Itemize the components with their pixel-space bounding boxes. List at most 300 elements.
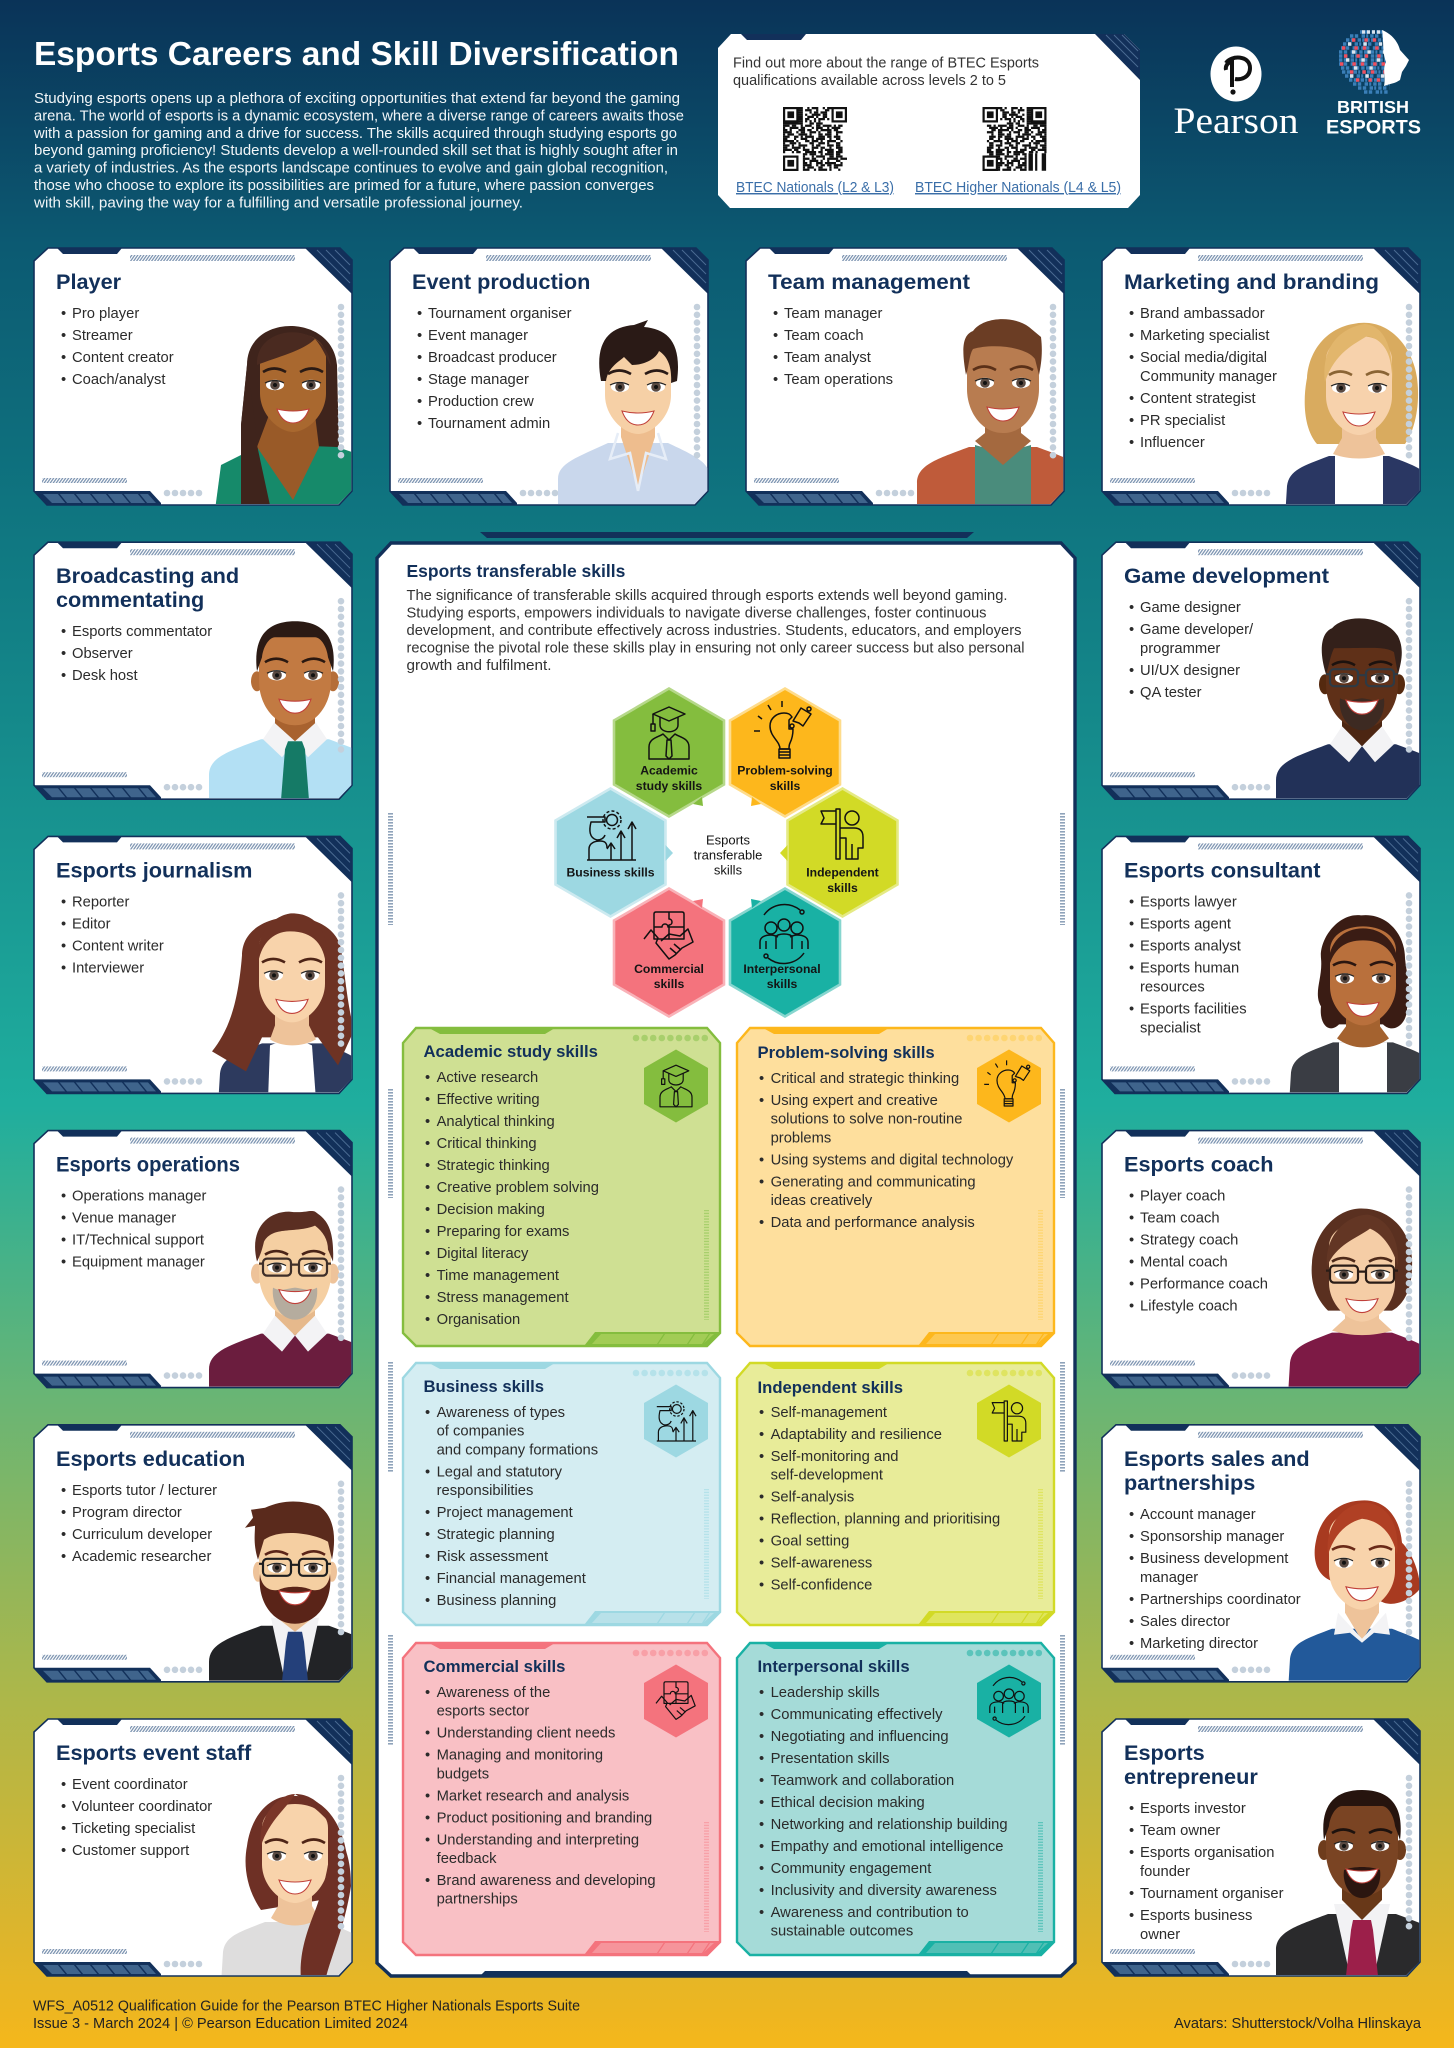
career card: Esports sales and partnerships: • xyxy=(1129,1551,1134,1567)
skill panel: Business skills: Financial management xyxy=(437,1571,586,1587)
skill panel: Academic study skills: Organisation xyxy=(437,1312,520,1328)
logo: Pearson xyxy=(1174,46,1298,142)
skill panel: Interpersonal skills: Negotiating and influencing xyxy=(771,1729,949,1745)
icon: team xyxy=(977,1664,1041,1738)
hexagon: Academic study skills: Academic xyxy=(640,764,698,778)
hexagon: Commercial skills: Commercial xyxy=(634,962,704,976)
career card: Esports coach: Esports coach xyxy=(1124,1152,1273,1177)
career card: Esports operations: • xyxy=(61,1211,66,1227)
career card: Esports event staff: Ticketing specialist xyxy=(72,1821,195,1837)
skill panel: Independent skills: • xyxy=(759,1490,764,1506)
career card: Esports coach: • xyxy=(1129,1189,1134,1205)
career card: Esports event staff xyxy=(34,1719,369,1985)
skill panel: Academic study skills xyxy=(403,1028,720,1346)
icon: flag person xyxy=(977,1384,1041,1458)
skill panel: Academic study skills: • xyxy=(425,1268,430,1284)
career card: Esports entrepreneur: • xyxy=(1129,1908,1134,1924)
skill panel: Independent skills: • xyxy=(759,1534,764,1550)
career card: Esports journalism: Editor xyxy=(72,916,111,932)
skill panel: Problem-solving skills xyxy=(737,1028,1054,1346)
career card: Marketing and branding: • xyxy=(1129,328,1134,344)
career card: Team management: • xyxy=(773,372,778,388)
career card: Team management: Team manager xyxy=(784,306,882,322)
skill panel: Business skills: Project management xyxy=(437,1505,573,1521)
career card: Event production: • xyxy=(417,328,422,344)
career card: Esports entrepreneur: • xyxy=(1129,1801,1134,1817)
skill panel: Interpersonal skills: Awareness and contribution to xyxy=(771,1905,969,1921)
career card: Esports education: • xyxy=(61,1549,66,1565)
career card: Esports journalism: Interviewer xyxy=(72,960,144,976)
career card: Esports entrepreneur: Esports business xyxy=(1140,1908,1252,1924)
career card: Esports journalism: Esports journalism xyxy=(56,857,252,882)
skill panel: Interpersonal skills: • xyxy=(759,1883,764,1899)
skill panel: Business skills: Legal and statutory xyxy=(437,1464,563,1480)
skill panel: Academic study skills: Academic study skills xyxy=(424,1042,598,1061)
hexagon diagram xyxy=(556,688,898,1016)
career card: Esports coach: Player coach xyxy=(1140,1189,1225,1205)
career card: Event production: • xyxy=(417,372,422,388)
skill panel: Academic study skills: Active research xyxy=(437,1070,538,1086)
skill panel: Interpersonal skills: Teamwork and collaboration xyxy=(771,1773,954,1789)
career card: Esports entrepreneur: • xyxy=(1129,1823,1134,1839)
skill panel: Independent skills: • xyxy=(759,1405,764,1421)
career card: Esports coach: Team coach xyxy=(1140,1211,1220,1227)
skill panel: Commercial skills: Brand awareness and developing xyxy=(437,1873,656,1889)
career card: Esports sales and partnerships: • xyxy=(1129,1636,1134,1652)
skill panel: Interpersonal skills: • xyxy=(759,1751,764,1767)
skill panel: Interpersonal skills: • xyxy=(759,1707,764,1723)
career card: Esports coach: Lifestyle coach xyxy=(1140,1299,1238,1315)
career card: Esports coach: Strategy coach xyxy=(1140,1233,1238,1249)
skill panel: Academic study skills: Stress management xyxy=(437,1290,569,1306)
career card: Player xyxy=(34,248,355,510)
skill panel: Independent skills: Self-awareness xyxy=(771,1556,872,1572)
skill panel: Interpersonal skills: Community engagement xyxy=(771,1861,931,1877)
skill panel: Interpersonal skills: Communicating effectively xyxy=(771,1707,943,1723)
career card: Esports coach: Mental coach xyxy=(1140,1255,1228,1271)
career card: Esports education: Esports tutor / lecturer xyxy=(72,1483,217,1499)
skill panel: Independent skills: • xyxy=(759,1449,764,1465)
career card: Esports sales and partnerships: Business development xyxy=(1140,1551,1288,1567)
text block: transferable skills intro: growth and fulfilment. xyxy=(406,658,552,674)
skill panel: Independent skills: self-development xyxy=(771,1468,883,1484)
icon: lightbulb xyxy=(977,1050,1041,1122)
intro text block: those who choose to explore its possibilities are primed for a future, where passion converges xyxy=(34,178,654,194)
logo: British Esports: BRITISH xyxy=(1337,97,1409,117)
career card: Esports consultant: resources xyxy=(1140,979,1205,995)
skill panel: Academic study skills: • xyxy=(425,1224,430,1240)
career card: Esports coach: • xyxy=(1129,1233,1134,1249)
skill panel: Problem-solving skills: problems xyxy=(771,1130,831,1146)
career card: Marketing and branding: • xyxy=(1129,413,1134,429)
logo: Pearson: Pearson xyxy=(1174,101,1298,142)
career card: Game development: Game development xyxy=(1124,563,1329,588)
QR code 2 xyxy=(982,107,1046,171)
career card: Player: Coach/analyst xyxy=(72,372,165,388)
career card: Marketing and branding: Community manager xyxy=(1140,369,1277,385)
skill panel: Problem-solving skills: ideas creatively xyxy=(771,1193,873,1209)
avatar: esports operations xyxy=(209,1211,352,1387)
career card: Team management: Team management xyxy=(768,269,970,294)
career card: Event production: Broadcast producer xyxy=(428,350,557,366)
intro text block: with skill, paving the way for a fulfilling and versatile professional journey. xyxy=(33,195,523,211)
career card: Player: Content creator xyxy=(72,350,174,366)
centre label: transferable xyxy=(694,848,762,862)
skill panel: Academic study skills: Preparing for exams xyxy=(437,1224,569,1240)
skill panel: Independent skills xyxy=(737,1363,1054,1625)
career card: Esports operations: IT/Technical support xyxy=(72,1233,204,1249)
skill panel: Independent skills: • xyxy=(759,1427,764,1443)
career card: Event production: • xyxy=(417,416,422,432)
skill panel: Interpersonal skills: Ethical decision making xyxy=(771,1795,925,1811)
avatar: team management xyxy=(916,319,1064,504)
hexagon: Academic study skills xyxy=(614,688,724,816)
career card: Esports sales and partnerships: Marketing director xyxy=(1140,1636,1258,1652)
centre label: skills xyxy=(714,862,743,878)
avatar: esports education xyxy=(209,1502,352,1681)
skill panel: Academic study skills: • xyxy=(425,1202,430,1218)
career card: Marketing and branding: PR specialist xyxy=(1140,413,1225,429)
career card: Event production: Tournament organiser xyxy=(428,306,572,322)
career card: Game development: QA tester xyxy=(1140,685,1202,701)
career card: Esports consultant: • xyxy=(1129,894,1134,910)
skill panel: Business skills: Business skills xyxy=(424,1377,544,1396)
skill panel: Business skills: • xyxy=(425,1405,430,1421)
career card: Game development: UI/UX designer xyxy=(1140,663,1240,679)
skill panel: Interpersonal skills: • xyxy=(759,1817,764,1833)
skill panel: Business skills: • xyxy=(425,1527,430,1543)
career card: Player: Streamer xyxy=(72,328,133,344)
skill panel: Independent skills: Goal setting xyxy=(771,1534,849,1550)
skill panel: Interpersonal skills: Leadership skills xyxy=(771,1685,880,1701)
text block: transferable skills intro xyxy=(406,588,1024,674)
career card: Team management: • xyxy=(773,328,778,344)
logo: British Esports xyxy=(1326,30,1421,138)
career card: Game development: programmer xyxy=(1140,641,1220,657)
skill panel: Independent skills: Self-analysis xyxy=(771,1490,854,1506)
panel: QR links: qualifications available across levels 2 to 5 xyxy=(733,73,1006,89)
hexagon: Problem-solving skills: skills xyxy=(770,779,800,793)
text block: transferable skills intro: development, and contribute effectively across industries. Students, educators, and employers xyxy=(406,623,1022,639)
centre label: Esports xyxy=(706,832,751,848)
career card: Esports entrepreneur: owner xyxy=(1140,1927,1180,1943)
career card: Event production: • xyxy=(417,394,422,410)
hexagon: Interpersonal skills xyxy=(730,888,840,1016)
career card: Marketing and branding: • xyxy=(1129,350,1134,366)
career card: Esports sales and partnerships: Sales director xyxy=(1140,1614,1230,1630)
career card: Esports event staff: • xyxy=(61,1799,66,1815)
career card: Esports education: • xyxy=(61,1505,66,1521)
hexagon: Commercial skills xyxy=(614,888,724,1016)
skill panel: Commercial skills: esports sector xyxy=(437,1704,529,1720)
skill panel: Commercial skills: Market research and analysis xyxy=(437,1788,629,1804)
skill panel: Business skills: Strategic planning xyxy=(437,1527,555,1543)
skill panel: Commercial skills: Commercial skills xyxy=(424,1657,565,1676)
career card: Esports consultant: Esports agent xyxy=(1140,916,1231,932)
skill panel: Independent skills: • xyxy=(759,1512,764,1528)
career card: Esports operations: • xyxy=(61,1233,66,1249)
career card: Marketing and branding: Brand ambassador xyxy=(1140,306,1265,322)
career card: Esports event staff: Customer support xyxy=(72,1843,189,1859)
intro text block: with a passion for gaming and a drive for success. The skills acquired through studying esports go xyxy=(33,126,677,142)
career card: Event production: Event manager xyxy=(428,328,528,344)
skill panel: Business skills: • xyxy=(425,1505,430,1521)
career card: Esports event staff: • xyxy=(61,1843,66,1859)
panel: QR links xyxy=(718,34,1140,208)
skill panel: Business skills: and company formations xyxy=(437,1442,598,1458)
career card: Player: • xyxy=(61,350,66,366)
hexagon: Problem-solving skills xyxy=(730,688,840,816)
skill panel: Interpersonal skills: Networking and relationship building xyxy=(771,1817,1008,1833)
career card: Esports coach: • xyxy=(1129,1211,1134,1227)
career card: Esports entrepreneur: entrepreneur xyxy=(1124,1764,1258,1789)
career card: Player: Player xyxy=(56,269,122,294)
skill panel: Academic study skills: Analytical thinking xyxy=(437,1114,555,1130)
career card: Esports consultant: Esports analyst xyxy=(1140,938,1241,954)
skill panel: Academic study skills: • xyxy=(425,1312,430,1328)
career card: Event production xyxy=(390,248,710,512)
skill panel: Business skills: • xyxy=(425,1549,430,1565)
logo: British Esports: ESPORTS xyxy=(1326,116,1421,138)
skill panel: Commercial skills: • xyxy=(425,1685,430,1701)
skill panel: Interpersonal skills: sustainable outcomes xyxy=(771,1924,913,1940)
career card: Marketing and branding: Content strategist xyxy=(1140,391,1256,407)
career card: Esports coach: • xyxy=(1129,1277,1134,1293)
skill panel: Academic study skills: • xyxy=(425,1136,430,1152)
career card: Esports sales and partnerships: manager xyxy=(1140,1570,1198,1586)
skill panel: Interpersonal skills: Presentation skills xyxy=(771,1751,889,1767)
career card: Marketing and branding: Marketing specialist xyxy=(1140,328,1270,344)
avatar: broadcasting xyxy=(209,621,352,798)
career card: Broadcasting and commentating: Esports commentator xyxy=(72,624,212,640)
skill panel: Academic study skills: Creative problem solving xyxy=(437,1180,599,1196)
skill panel: Interpersonal skills: • xyxy=(759,1861,764,1877)
footer: Avatars: Shutterstock/Volha Hlinskaya xyxy=(1174,2016,1422,2032)
panel: QR links: BTEC Nationals (L2 & L3) xyxy=(736,180,894,196)
career card: Esports entrepreneur: Esports investor xyxy=(1140,1801,1246,1817)
skill panel: Commercial skills: budgets xyxy=(437,1766,489,1782)
career card: Esports entrepreneur: • xyxy=(1129,1886,1134,1902)
icon: handshake puzzle xyxy=(644,1664,708,1738)
hexagon: Academic study skills: study skills xyxy=(636,779,702,793)
skill panel: Interpersonal skills: Interpersonal skills xyxy=(758,1657,910,1676)
career card: Broadcasting and commentating: Observer xyxy=(72,646,133,662)
career card: Event production: Stage manager xyxy=(428,372,529,388)
career card: Esports coach: • xyxy=(1129,1299,1134,1315)
skill panel: Business skills: Risk assessment xyxy=(437,1549,548,1565)
career card: Marketing and branding: Influencer xyxy=(1140,435,1205,451)
skill panel: Business skills xyxy=(403,1363,720,1625)
career card: Esports consultant: • xyxy=(1129,938,1134,954)
career card: Event production: Tournament admin xyxy=(428,416,550,432)
career card: Esports entrepreneur xyxy=(1102,1719,1448,1985)
career card: Esports sales and partnerships: Esports sales and xyxy=(1124,1446,1310,1471)
skill panel: Problem-solving skills: Using expert and creative xyxy=(771,1093,938,1109)
text block: transferable skills intro: The significance of transferable skills acquired through esports extends well beyond gaming. xyxy=(406,588,1007,604)
career card: Esports consultant: Esports facilities xyxy=(1140,1001,1247,1017)
skill panel: Interpersonal skills: • xyxy=(759,1685,764,1701)
skill panel: Problem-solving skills: solutions to solve non-routine xyxy=(771,1112,962,1128)
career card: Esports event staff: Esports event staff xyxy=(56,1740,252,1765)
hexagon: Problem-solving skills: Problem-solving xyxy=(737,764,833,778)
career card: Esports consultant xyxy=(1102,836,1437,1105)
panel: QR links: Find out more about the range of BTEC Esports xyxy=(733,55,1039,71)
career card: Esports journalism: Reporter xyxy=(72,894,129,910)
icon: business growth xyxy=(644,1384,708,1458)
career card: Esports operations: • xyxy=(61,1189,66,1205)
career card: Esports entrepreneur: Esports xyxy=(1124,1740,1205,1765)
career card: Game development: • xyxy=(1129,600,1134,616)
skill panel: Academic study skills: • xyxy=(425,1180,430,1196)
career card: Esports operations: Operations manager xyxy=(72,1189,207,1205)
career card: Esports coach xyxy=(1102,1131,1436,1396)
avatar: esports event staff xyxy=(222,1794,352,1975)
career card: Esports operations: • xyxy=(61,1255,66,1271)
skill panel: Independent skills: • xyxy=(759,1578,764,1594)
career card: Esports consultant: Esports human xyxy=(1140,960,1239,976)
career card: Player: Pro player xyxy=(72,306,139,322)
skill panel: Interpersonal skills xyxy=(737,1643,1054,1955)
skill panel: Commercial skills: • xyxy=(425,1810,430,1826)
career card: Esports consultant: • xyxy=(1129,916,1134,932)
career card: Broadcasting and commentating: • xyxy=(61,668,66,684)
career card: Esports education: Esports education xyxy=(56,1446,245,1471)
career card: Esports sales and partnerships xyxy=(1102,1425,1436,1692)
career card: Marketing and branding: • xyxy=(1129,391,1134,407)
skill panel: Independent skills: Self-management xyxy=(771,1405,887,1421)
intro text block: beyond gaming proficiency! Students develop a well-rounded skill set that is highly sought after in xyxy=(34,143,678,159)
heading: transferable skills: Esports transferable skills xyxy=(406,561,626,581)
skill panel: Academic study skills: Strategic thinking xyxy=(437,1158,550,1174)
skill panel: Business skills: of companies xyxy=(437,1424,524,1440)
career card: Esports education: Program director xyxy=(72,1505,182,1521)
career card: Broadcasting and commentating: commentating xyxy=(56,587,204,612)
career card: Game development: • xyxy=(1129,663,1134,679)
skill panel: Interpersonal skills: • xyxy=(759,1729,764,1745)
career card: Player: • xyxy=(61,372,66,388)
hexagon: Interpersonal skills: Interpersonal xyxy=(743,962,821,976)
career card: Broadcasting and commentating: Desk host xyxy=(72,668,138,684)
skill panel: Problem-solving skills: Critical and strategic thinking xyxy=(771,1071,959,1087)
intro text block: a variety of industries. As the esports landscape continues to evolve and gain global recognition, xyxy=(34,161,668,177)
skill panel: Independent skills: Reflection, planning and prioritising xyxy=(771,1512,1000,1528)
career card: Esports operations xyxy=(33,1130,353,1388)
skill panel: Academic study skills: • xyxy=(425,1246,430,1262)
career card: Esports consultant: • xyxy=(1129,960,1134,976)
skill panel: Commercial skills: Product positioning and branding xyxy=(437,1810,652,1826)
career card: Esports sales and partnerships: • xyxy=(1129,1614,1134,1630)
career card: Esports journalism: • xyxy=(61,894,66,910)
skill panel: Problem-solving skills: Using systems and digital technology xyxy=(771,1152,1014,1168)
skill panel: Commercial skills xyxy=(403,1643,720,1955)
career card: Team management xyxy=(745,247,1065,506)
skill panel: Independent skills: • xyxy=(759,1556,764,1572)
avatar: player xyxy=(215,326,355,510)
career card: Esports event staff: • xyxy=(61,1821,66,1837)
skill panel: Interpersonal skills: • xyxy=(759,1905,764,1921)
avatar: esports coach xyxy=(1288,1208,1420,1387)
career card: Game development: • xyxy=(1129,622,1134,638)
career card: Esports sales and partnerships: • xyxy=(1129,1507,1134,1523)
career card: Event production: • xyxy=(417,306,422,322)
career card: Esports entrepreneur: Esports organisation xyxy=(1140,1845,1274,1861)
skill panel: Commercial skills: Managing and monitoring xyxy=(437,1748,603,1764)
career card: Esports education: • xyxy=(61,1483,66,1499)
skill panel: Problem-solving skills: Problem-solving skills xyxy=(758,1043,935,1062)
avatar: game development xyxy=(1276,618,1420,798)
career card: Esports education xyxy=(33,1424,353,1683)
skill panel: Problem-solving skills: • xyxy=(759,1152,764,1168)
career card: Esports sales and partnerships: Account manager xyxy=(1140,1507,1256,1523)
title: Esports Careers and Skill Diversification xyxy=(34,35,679,72)
career card: Esports journalism: Content writer xyxy=(72,938,164,954)
skill panel: Academic study skills: • xyxy=(425,1290,430,1306)
intro text block xyxy=(33,91,684,211)
avatar: event production xyxy=(558,320,710,512)
skill panel: Business skills: • xyxy=(425,1571,430,1587)
skill panel: Academic study skills: • xyxy=(425,1158,430,1174)
career card: Esports education: • xyxy=(61,1527,66,1543)
hexagon: Commercial skills: skills xyxy=(654,977,684,991)
career card: Esports sales and partnerships: partnerships xyxy=(1124,1470,1255,1495)
skill panel: Academic study skills: Critical thinking xyxy=(437,1136,537,1152)
skill panel: Interpersonal skills: Empathy and emotional intelligence xyxy=(771,1839,1003,1855)
skill panel: Interpersonal skills: • xyxy=(759,1839,764,1855)
career card: Esports entrepreneur: Tournament organiser xyxy=(1140,1886,1284,1902)
skill panel: Business skills: responsibilities xyxy=(437,1483,533,1499)
skill panel: Commercial skills: • xyxy=(425,1726,430,1742)
skill panel: Commercial skills: Awareness of the xyxy=(437,1685,550,1701)
career card: Marketing and branding: Marketing and branding xyxy=(1124,269,1379,294)
career card: Team management: Team analyst xyxy=(784,350,871,366)
career card: Team management: Team operations xyxy=(784,372,893,388)
career card: Game development: Game designer xyxy=(1140,600,1241,616)
avatar: esports journalism xyxy=(212,913,352,1092)
hexagon: Business skills: Business skills xyxy=(566,866,655,880)
career card: Esports journalism: • xyxy=(61,916,66,932)
intro text block: Studying esports opens up a plethora of exciting opportunities that extend far beyond the gaming xyxy=(34,91,680,107)
career card: Esports entrepreneur: • xyxy=(1129,1845,1134,1861)
career card: Esports education: Curriculum developer xyxy=(72,1527,212,1543)
skill panel: Independent skills: Self-confidence xyxy=(771,1578,872,1594)
skill panel: Independent skills: Self-monitoring and xyxy=(771,1449,899,1465)
footer: Issue 3 - March 2024 | © Pearson Education Limited 2024 xyxy=(33,2016,408,2032)
skill panel: Academic study skills: • xyxy=(425,1070,430,1086)
skill panel: Interpersonal skills: • xyxy=(759,1795,764,1811)
avatar: marketing and branding xyxy=(1286,322,1420,504)
career card: Esports education: Academic researcher xyxy=(72,1549,211,1565)
hexagon: Independent skills: Independent xyxy=(806,866,879,880)
career card: Team management: • xyxy=(773,306,778,322)
career card: Esports sales and partnerships: • xyxy=(1129,1592,1134,1608)
career card: Event production: • xyxy=(417,350,422,366)
skill panel: Independent skills: Adaptability and resilience xyxy=(771,1427,942,1443)
career card: Event production: Event production xyxy=(412,269,590,294)
panel: QR links: BTEC Higher Nationals (L4 & L5) xyxy=(915,180,1121,196)
career card: Esports journalism: • xyxy=(61,938,66,954)
career card: Marketing and branding: Social media/digital xyxy=(1140,350,1267,366)
career card: Esports journalism xyxy=(34,836,366,1106)
career card: Marketing and branding xyxy=(1102,248,1433,519)
career card: Esports event staff: Volunteer coordinator xyxy=(72,1799,212,1815)
career card: Marketing and branding: • xyxy=(1129,435,1134,451)
avatar: esports consultant xyxy=(1290,915,1420,1092)
QR code 1 xyxy=(783,107,847,171)
career card: Team management: Team coach xyxy=(784,328,864,344)
career card: Esports event staff: Event coordinator xyxy=(72,1777,188,1793)
career card: Broadcasting and commentating: • xyxy=(61,624,66,640)
skill panel: Academic study skills: Decision making xyxy=(437,1202,545,1218)
